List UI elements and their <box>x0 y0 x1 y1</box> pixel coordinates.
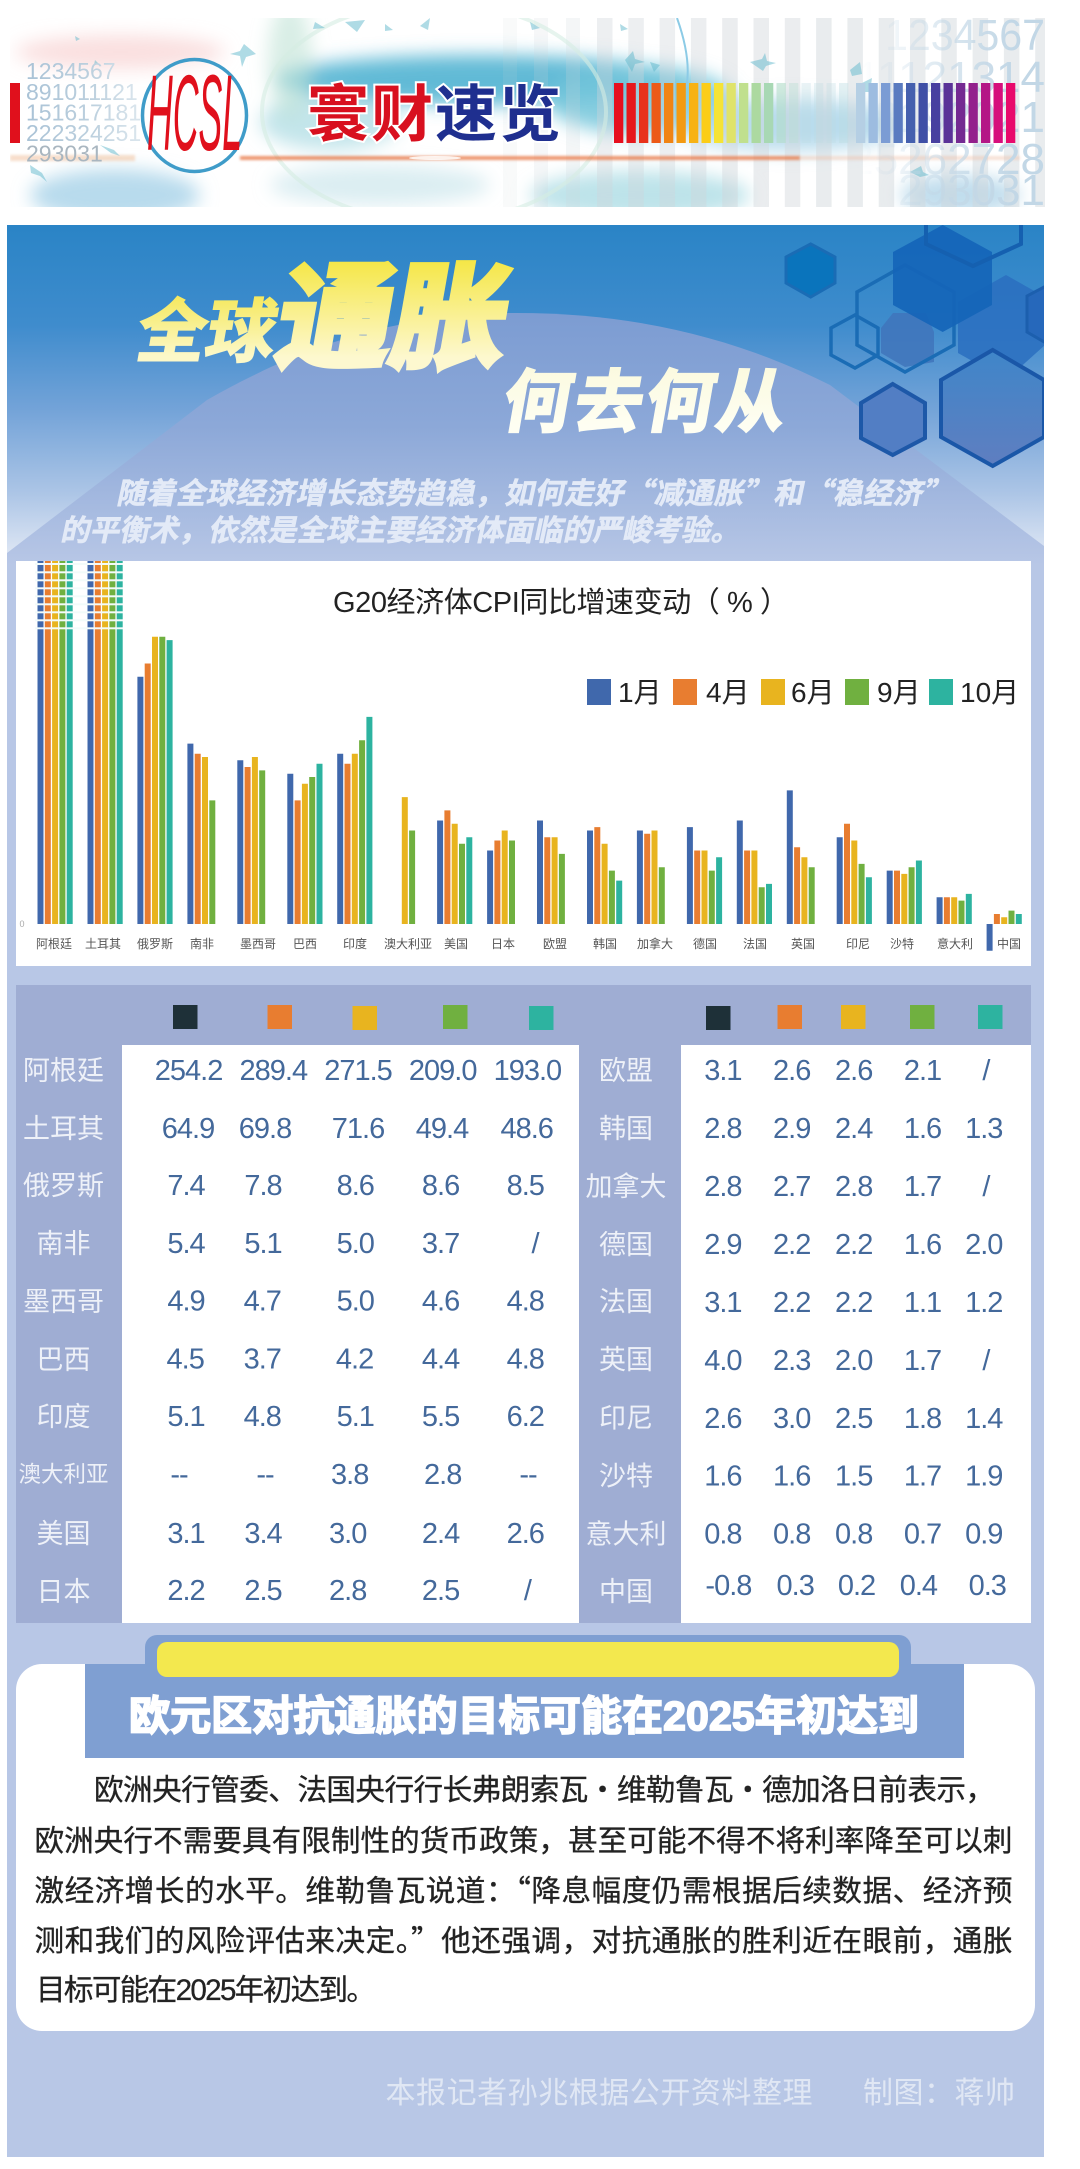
chart legend: 4月 <box>706 677 750 708</box>
table values right: 1.4 <box>965 1403 1003 1435</box>
table values right: 1.6 <box>773 1460 810 1492</box>
table values right: 1.1 <box>904 1287 941 1319</box>
table values right: 2.7 <box>773 1171 810 1203</box>
table values right: 2.0 <box>835 1345 872 1377</box>
bars: January <box>40 561 990 951</box>
table values right: 0.8 <box>773 1518 810 1550</box>
chart country labels: 阿根廷 <box>36 937 72 951</box>
headline: 全球: 全球 <box>130 277 286 377</box>
bars: October <box>70 561 1019 924</box>
table values left: 5.0 <box>337 1228 374 1260</box>
table values left: / <box>524 1575 533 1607</box>
bars: September <box>62 561 1011 924</box>
intro text: 随着全球经济增长态势趋稳，如何走好“减通胀”和“稳经济” <box>114 469 959 512</box>
chart country labels: 印度 <box>343 936 367 951</box>
article body text: 激经济增长的水平。维勒鲁瓦说道：“降息幅度仍需根据后续数据、经济预 <box>34 1867 1012 1910</box>
table values left: 3.1 <box>167 1518 205 1550</box>
table values left: 7.4 <box>167 1170 206 1202</box>
table values right: 2.9 <box>704 1229 742 1261</box>
table values left: 49.4 <box>416 1113 469 1145</box>
chart country labels: 意大利 <box>937 936 973 951</box>
table values right: 3.1 <box>704 1055 742 1087</box>
table values left: 5.1 <box>244 1228 282 1260</box>
table values left: 209.0 <box>409 1055 476 1087</box>
heading band <box>85 1664 964 1758</box>
table values left: 6.2 <box>507 1401 544 1433</box>
left number block: 891011121 <box>26 79 138 105</box>
table values left: 4.8 <box>507 1286 544 1318</box>
masthead title: 寰财速览 <box>307 64 561 154</box>
table values left: 8.5 <box>507 1170 544 1202</box>
intro text <box>58 469 959 549</box>
row labels right: 中国 <box>599 1577 653 1607</box>
table values left: 193.0 <box>494 1055 561 1087</box>
table values right: 1.9 <box>965 1460 1002 1492</box>
table values right: 1.3 <box>965 1113 1002 1145</box>
table values right: 2.2 <box>773 1229 810 1261</box>
table values left: 48.6 <box>500 1113 553 1145</box>
table values left: 5.1 <box>167 1401 205 1433</box>
chart country labels: 土耳其 <box>85 937 121 951</box>
banner: 寰财速览 masthead <box>10 18 1045 207</box>
table values left: 2.6 <box>507 1518 544 1550</box>
background vertical stripes <box>503 18 1045 207</box>
table values right: 2.9 <box>773 1113 810 1145</box>
chart legend: 6月 <box>791 677 835 708</box>
credits: 制图：蒋帅 <box>863 2077 1015 2110</box>
row labels right <box>586 1056 666 1607</box>
table values right: 1.8 <box>904 1403 941 1435</box>
table values left: 2.5 <box>244 1575 282 1607</box>
chart country labels: 日本 <box>491 937 515 951</box>
article heading: 欧元区对抗通胀的目标可能在2025年初达到 <box>129 1693 919 1739</box>
row labels left: 日本 <box>36 1577 90 1607</box>
table values left: -- <box>519 1459 537 1491</box>
bars: June <box>55 561 1004 924</box>
table values left: 5.1 <box>337 1401 374 1433</box>
right number block: 22232425262728 <box>702 135 1045 184</box>
article body text: 测和我们的风险评估来决定。”他还强调，对抗通胀的胜利近在眼前，通胀 <box>34 1917 1012 1960</box>
row labels left: 土耳其 <box>23 1114 104 1144</box>
table values right: 1.7 <box>904 1171 941 1203</box>
table values left: -- <box>170 1459 188 1491</box>
table values right: 4.0 <box>704 1345 742 1377</box>
row labels left: 巴西 <box>36 1345 90 1375</box>
chart legend <box>587 677 1019 708</box>
table values right: / <box>982 1345 991 1377</box>
chart country labels: 南非 <box>190 936 214 951</box>
table values left: 2.4 <box>422 1518 460 1550</box>
row labels right: 欧盟 <box>599 1056 653 1086</box>
right number block: 1234567 <box>885 11 1045 60</box>
table values right: 0.9 <box>965 1518 1002 1550</box>
table values left: -- <box>256 1459 274 1491</box>
article white card <box>16 1664 1035 2031</box>
table values right: 2.2 <box>773 1287 810 1319</box>
row labels left <box>18 1056 109 1607</box>
left number block: 293031 <box>26 140 103 166</box>
chart legend: 1月 <box>618 677 662 708</box>
table values right: 2.1 <box>904 1055 941 1087</box>
table values left: 3.7 <box>422 1228 459 1260</box>
table values right: 1.2 <box>965 1287 1002 1319</box>
table values right: 1.7 <box>904 1345 941 1377</box>
table values right: 2.2 <box>835 1229 872 1261</box>
chart country labels: 英国 <box>791 937 815 951</box>
credits: 本报记者孙兆根据公开资料整理 <box>386 2077 812 2110</box>
table values left: 7.8 <box>244 1170 282 1202</box>
table values left: 2.2 <box>167 1575 205 1607</box>
table values left: 4.2 <box>336 1344 373 1376</box>
row labels right: 加拿大 <box>586 1172 666 1202</box>
row labels left: 南非 <box>36 1229 90 1259</box>
table values right: 2.5 <box>835 1403 872 1435</box>
headline: 何去何从: 何去何从 <box>497 348 796 446</box>
logo: HCSL: HCSL <box>147 53 242 174</box>
table values left: 2.8 <box>329 1575 366 1607</box>
left number block: 1234567 <box>26 58 116 84</box>
table values left: 4.6 <box>422 1286 459 1318</box>
table values right: 0.2 <box>838 1570 875 1602</box>
table values right: 0.7 <box>904 1518 941 1550</box>
credits <box>386 2077 1015 2110</box>
chart country labels: 沙特 <box>890 936 914 951</box>
article body text: 欧洲央行管委、法国央行行长弗朗索瓦·维勒鲁瓦·德加洛日前表示， <box>94 1766 995 1809</box>
right number block <box>702 11 1045 215</box>
decorative hexagons <box>786 225 1046 466</box>
row labels left: 墨西哥 <box>23 1287 104 1317</box>
row labels left: 印度 <box>36 1402 90 1432</box>
table values left: 4.5 <box>167 1344 204 1376</box>
table values right: 2.6 <box>835 1055 872 1087</box>
chart country labels: 德国 <box>693 936 717 951</box>
table values left: / <box>531 1228 540 1260</box>
chart country labels: 巴西 <box>293 937 317 951</box>
table values right: 1.7 <box>904 1460 941 1492</box>
yellow bar <box>157 1642 899 1677</box>
table values right: 3.0 <box>773 1403 810 1435</box>
table values right <box>704 1055 1006 1602</box>
chart country labels: 印尼 <box>846 937 870 951</box>
axis break stripes on the two tallest bars <box>35 563 123 629</box>
row labels right: 沙特 <box>599 1462 653 1492</box>
chart country labels <box>36 936 1021 951</box>
table values right: 0.8 <box>835 1518 872 1550</box>
chart country labels: 中国 <box>997 936 1021 951</box>
chart country labels: 美国 <box>444 937 468 951</box>
row labels right: 意大利 <box>586 1520 666 1550</box>
table values right: 0.4 <box>900 1570 938 1602</box>
table values left: 4.4 <box>422 1344 460 1376</box>
table values right: 0.8 <box>704 1518 742 1550</box>
table values left: 3.4 <box>244 1518 283 1550</box>
row labels right: 英国 <box>599 1345 653 1375</box>
chart title: G20经济体CPI同比增速变动（ % ） <box>333 586 789 619</box>
table values left: 8.6 <box>337 1170 374 1202</box>
chart country labels: 欧盟 <box>543 937 567 951</box>
table values right: 2.3 <box>773 1345 810 1377</box>
table values left: 69.8 <box>239 1113 291 1145</box>
row labels right: 法国 <box>599 1287 653 1317</box>
chart country labels: 俄罗斯 <box>137 937 173 951</box>
table values right: 0.3 <box>969 1570 1006 1602</box>
table values right: 2.2 <box>835 1287 872 1319</box>
right number block: 15161718192021 <box>702 93 1045 142</box>
intro text: 的平衡术，依然是全球主要经济体面临的严峻考验。 <box>58 506 747 549</box>
chart country labels: 澳大利亚 <box>384 937 432 951</box>
left number block: 151617181 <box>26 100 141 126</box>
table values right: 1.6 <box>704 1460 742 1492</box>
table values right: 2.4 <box>835 1113 873 1145</box>
chart country labels: 墨西哥 <box>240 937 276 951</box>
rainbow bar <box>614 83 1015 143</box>
table values right: 3.1 <box>704 1287 742 1319</box>
table values right: 1.5 <box>835 1460 872 1492</box>
headline: 通胀: 通胀 <box>267 227 524 392</box>
axis zero label: 0 <box>19 919 25 929</box>
left number block <box>26 58 141 166</box>
article body text <box>34 1766 1012 2007</box>
table values right: -0.8 <box>705 1570 751 1602</box>
row labels left: 澳大利亚 <box>18 1462 109 1487</box>
table values left: 8.6 <box>422 1170 459 1202</box>
panel: article <box>16 1635 1035 2031</box>
bars: April <box>48 561 997 924</box>
row labels left: 阿根廷 <box>23 1056 104 1086</box>
table values right: 2.8 <box>835 1171 872 1203</box>
table values left <box>155 1055 561 1607</box>
table values left: 289.4 <box>240 1055 308 1087</box>
table values left: 3.0 <box>329 1518 366 1550</box>
table values right: 0.3 <box>777 1570 814 1602</box>
table values left: 3.7 <box>244 1344 281 1376</box>
table values left: 64.9 <box>162 1113 214 1145</box>
table values right: / <box>982 1055 991 1087</box>
chart country labels: 加拿大 <box>637 936 673 951</box>
table values right: / <box>982 1171 991 1203</box>
table values left: 2.8 <box>424 1459 461 1491</box>
table values right: 1.6 <box>904 1229 941 1261</box>
chart country labels: 韩国 <box>593 936 617 951</box>
row labels left: 美国 <box>36 1519 90 1549</box>
article body text: 欧洲央行不需要具有限制性的货币政策，甚至可能不得不将利率降至可以刺 <box>34 1817 1012 1860</box>
row labels left: 俄罗斯 <box>23 1171 104 1201</box>
right number block: 293031 <box>898 166 1045 215</box>
table values right: 1.6 <box>904 1113 941 1145</box>
row labels right: 韩国 <box>599 1114 653 1144</box>
article body text: 目标可能在2025年初达到。 <box>36 1974 376 2007</box>
left number block: 222324251 <box>26 120 141 146</box>
panel: data table <box>16 985 1031 1623</box>
table values left: 271.5 <box>324 1055 392 1087</box>
right number block: 91011121314 <box>782 53 1045 102</box>
chart country labels: 法国 <box>743 937 767 951</box>
table values left: 4.9 <box>167 1286 205 1318</box>
chart legend: 10月 <box>960 677 1019 708</box>
table values right: 2.6 <box>773 1055 810 1087</box>
chart legend: 9月 <box>877 677 921 708</box>
row labels right: 印尼 <box>599 1404 653 1434</box>
row labels right: 德国 <box>599 1230 653 1260</box>
panel: bar chart <box>16 561 1031 966</box>
table values left: 5.5 <box>422 1401 459 1433</box>
heading tab <box>145 1635 911 1685</box>
table values left: 5.4 <box>167 1228 206 1260</box>
red bar <box>10 83 20 143</box>
table values right: 2.6 <box>704 1403 742 1435</box>
table values left: 4.8 <box>244 1401 281 1433</box>
table values left: 2.5 <box>422 1575 459 1607</box>
table header colour keys <box>173 1005 1002 1030</box>
table values left: 254.2 <box>155 1055 222 1087</box>
table values left: 71.6 <box>332 1113 384 1145</box>
table values right: 2.0 <box>965 1229 1002 1261</box>
table values left: 5.0 <box>337 1286 374 1318</box>
table values left: 4.8 <box>507 1344 544 1376</box>
table values left: 4.7 <box>244 1286 281 1318</box>
table values left: 3.8 <box>331 1459 368 1491</box>
table values right: 2.8 <box>704 1113 742 1145</box>
table values right: 2.8 <box>704 1171 742 1203</box>
